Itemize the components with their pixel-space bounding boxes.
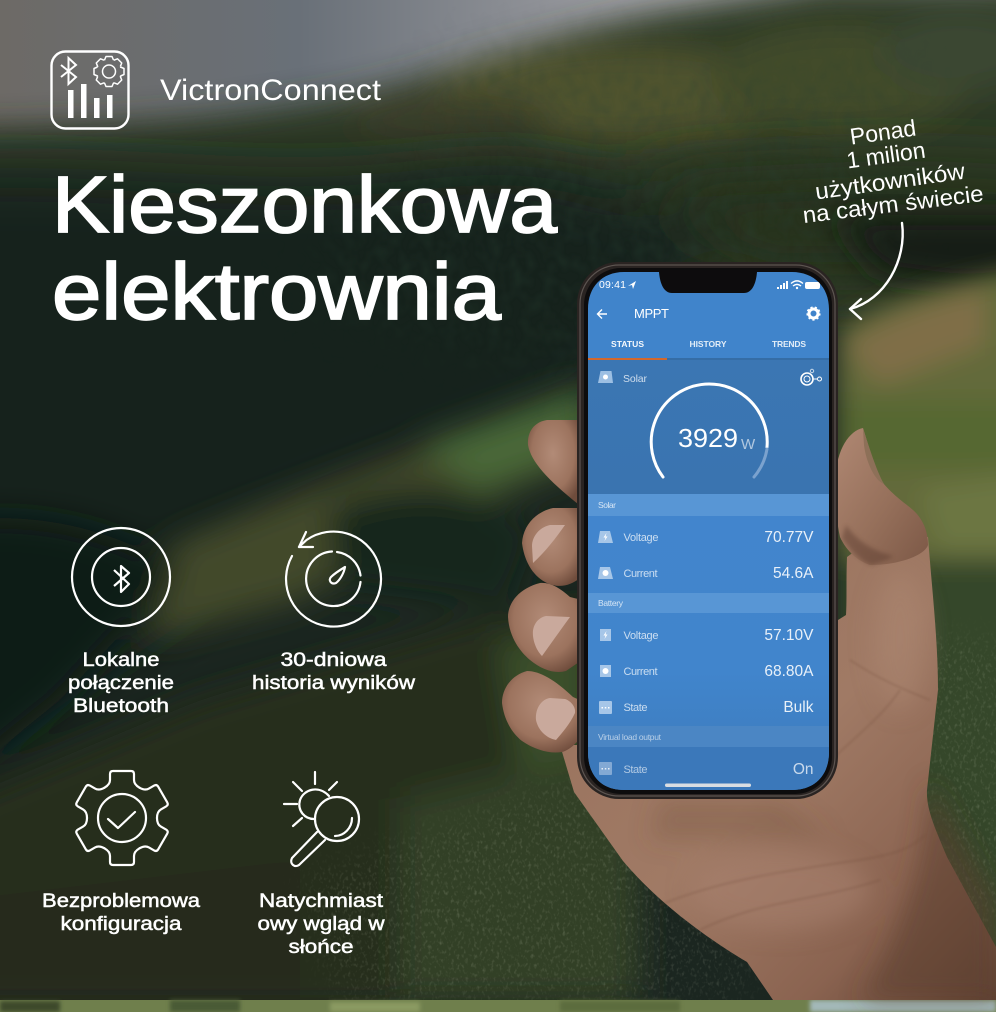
arrow to phone (850, 223, 903, 319)
phone: row labels: Voltage (624, 532, 658, 544)
feature: bluetooth (68, 528, 174, 717)
feature: history (252, 532, 416, 694)
bottom strip of next image (0, 1000, 996, 1012)
title: Kieszonkowa (52, 160, 558, 249)
phone: solar gauge: W (741, 436, 756, 453)
icon: gear with check (73, 771, 171, 865)
label: sunlight: Natychmiast (259, 890, 384, 912)
title: elektrownia (52, 247, 502, 336)
label: history: historia wyników (252, 672, 416, 694)
phone: body (577, 262, 838, 799)
icon: bluetooth circles (72, 528, 170, 626)
finger 2 (522, 508, 580, 586)
background: dark treeline right (830, 215, 996, 285)
hand: palm (560, 537, 996, 1000)
background: right hill (838, 265, 996, 1010)
phone: section labels: Solar (598, 500, 616, 510)
phone: tabs: TRENDS (772, 339, 806, 349)
phone: row icons (598, 531, 613, 775)
label: configuration: konfiguracja (60, 913, 182, 935)
phone: status bar: 09:41 (599, 279, 626, 291)
phone: tabs (611, 341, 806, 347)
hand: thumb crease (842, 525, 893, 565)
hand: thumb nail (863, 429, 884, 484)
icon: sun and magnifier (284, 772, 359, 866)
label: sunlight (258, 890, 386, 958)
phone: row values: 54.6A (773, 565, 814, 582)
phone: row values: 68.80A (764, 663, 814, 680)
hand: palm shading (650, 570, 996, 1000)
brand name: VictronConnect (160, 74, 382, 107)
phone: row values: 57.10V (764, 627, 814, 644)
phone: row labels: State (624, 702, 648, 714)
label: history: 30-dniowa (280, 649, 387, 671)
finger nails (532, 525, 575, 740)
phone: section labels: Virtual load output (598, 732, 662, 742)
logo icon (52, 52, 128, 128)
phone: screen (588, 272, 829, 790)
label: bluetooth: Bluetooth (73, 695, 169, 717)
label: bluetooth (68, 649, 174, 717)
background: mid slopes (0, 385, 640, 1010)
phone: tabs: STATUS (611, 339, 644, 349)
phone: solar gauge: 3929 (678, 423, 738, 453)
label: configuration: Bezproblemowa (42, 890, 200, 912)
finger 4 (502, 671, 584, 753)
icon: clock arrow gauge (286, 532, 381, 627)
label: history (252, 649, 416, 694)
phone: row values (764, 529, 814, 778)
hand holding phone (502, 420, 996, 1000)
phone: solar gauge: Solar (623, 373, 648, 385)
label: bluetooth: połączenie (68, 672, 174, 694)
callout: users (801, 115, 985, 228)
phone: row labels: Current (624, 666, 658, 678)
hand: thumb (836, 428, 928, 565)
phone: row values: 70.77V (764, 529, 814, 546)
phone: home bar (665, 784, 751, 787)
phone: row labels: Voltage (624, 630, 658, 642)
phone: row labels (624, 532, 658, 776)
finger 3 (508, 583, 582, 672)
feature: sunlight (258, 772, 386, 958)
phone: section labels (598, 500, 662, 742)
phone: row labels: State (624, 764, 648, 776)
finger 1 (528, 420, 578, 504)
label: configuration (42, 890, 200, 935)
label: sunlight: słońce (288, 936, 354, 958)
phone: row values: On (793, 761, 814, 778)
label: bluetooth: Lokalne (82, 649, 160, 671)
callout: users: 1 milion (845, 137, 927, 173)
phone: app header: MPPT (634, 306, 669, 321)
phone: section labels: Battery (598, 598, 624, 608)
phone: status bar (599, 280, 820, 290)
feature: configuration (42, 771, 200, 935)
phone: row labels: Current (624, 568, 658, 580)
phone: row values: Bulk (783, 699, 814, 716)
callout: users: użytkowników (813, 158, 967, 204)
phone: app header (598, 306, 820, 321)
callout: users: na całym świecie (801, 180, 985, 228)
callout: users: Ponad (848, 115, 918, 150)
phone: tabs: HISTORY (690, 339, 727, 349)
phone (577, 262, 838, 799)
label: sunlight: owy wgląd w (258, 913, 386, 935)
title (52, 160, 558, 336)
phone: solar gauge (598, 369, 822, 477)
hand: palm creases (660, 660, 930, 930)
